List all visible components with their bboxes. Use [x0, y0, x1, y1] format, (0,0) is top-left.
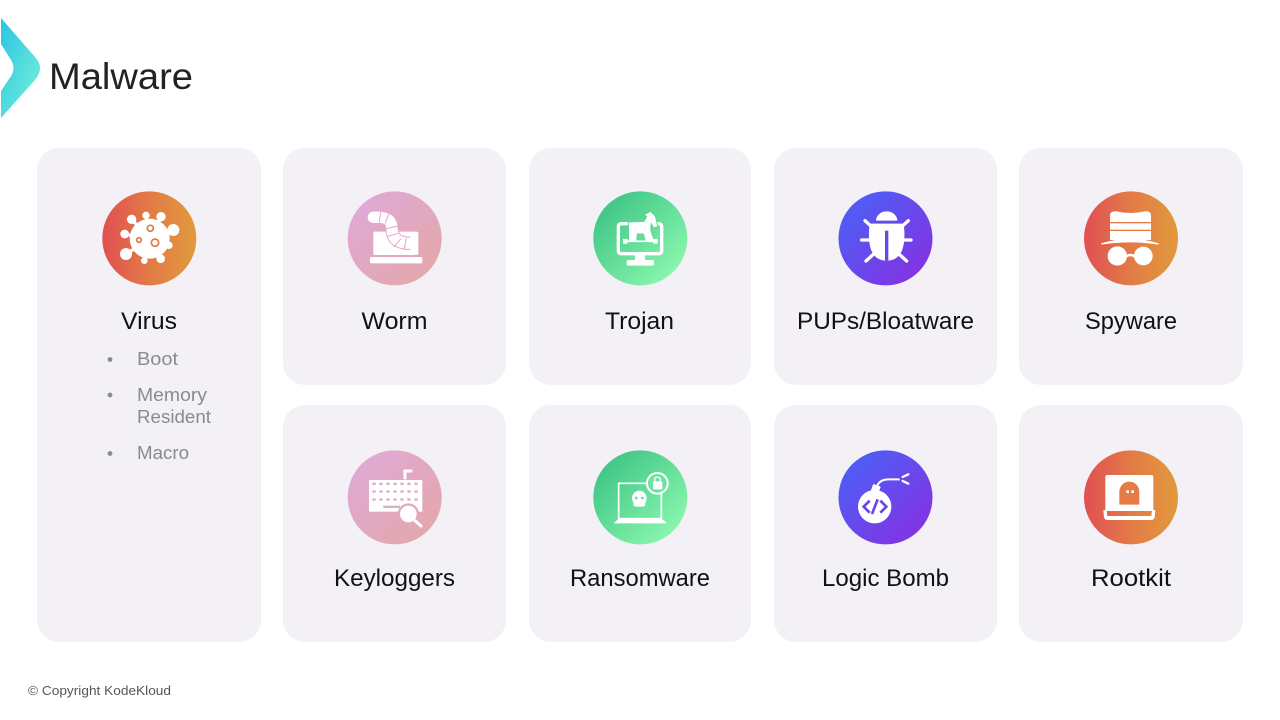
icon: keyboard with magnifier — [348, 450, 442, 544]
logo chevron — [1, 18, 40, 118]
icon: bug — [838, 191, 932, 285]
icon: worm — [348, 191, 442, 285]
label: Logic Bomb: Logic Bomb — [822, 565, 949, 592]
label: Trojan: Trojan — [605, 308, 674, 335]
panel: PUPs/Bloatware — [774, 148, 997, 385]
icon: spy hat and glasses — [1084, 191, 1178, 285]
panel: Keyloggers — [283, 405, 506, 642]
panel: Worm — [283, 148, 506, 385]
list: virus types: Resident — [137, 407, 211, 427]
label: Virus: Virus — [121, 308, 177, 335]
label: PUPs/Bloatware: PUPs/Bloatware — [797, 308, 974, 335]
label: Keyloggers: Keyloggers — [334, 565, 455, 592]
footer copyright: © Copyright KodeKloud — [28, 683, 171, 698]
label: Worm: Worm — [362, 308, 428, 335]
panel: Logic Bomb — [774, 405, 997, 642]
list: virus types: Boot — [137, 349, 178, 369]
list: virus types: Memory — [137, 385, 207, 405]
label: Rootkit: Rootkit — [1091, 565, 1171, 592]
list: virus types: Macro — [137, 443, 189, 463]
label: Spyware: Spyware — [1085, 308, 1177, 335]
title: Malware — [49, 56, 193, 97]
panel: Spyware — [1019, 148, 1243, 385]
panel: Rootkit — [1019, 405, 1243, 642]
label: Ransomware: Ransomware — [570, 565, 710, 592]
icon: virus — [102, 191, 196, 285]
panel: Trojan — [529, 148, 751, 385]
icon: laptop with skull and lock — [593, 450, 687, 544]
list: virus types — [108, 349, 211, 463]
icon: laptop with ghost — [1084, 450, 1178, 544]
panel: Ransomware — [529, 405, 751, 642]
icon: bomb with code — [838, 450, 932, 544]
panel: Virus — [37, 148, 261, 642]
icon: trojan horse on monitor — [593, 191, 687, 285]
